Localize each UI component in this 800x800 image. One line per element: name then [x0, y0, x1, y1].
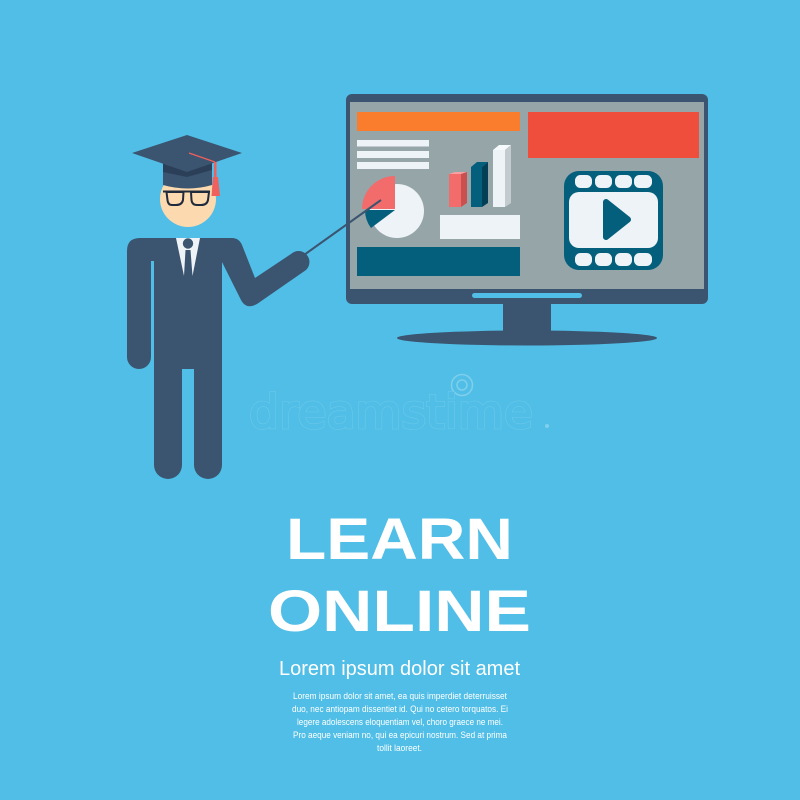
monitor slot — [472, 293, 582, 298]
tassel — [189, 153, 220, 196]
red banner — [528, 112, 699, 158]
watermark: dreamstime — [249, 385, 533, 439]
teal block — [357, 247, 520, 276]
title: ONLINE — [268, 579, 531, 644]
body paragraph: legere adolescens eloquentiam vel, choro graece ne mei. — [297, 717, 503, 727]
shirt collar — [176, 238, 200, 276]
graduation cap — [132, 135, 242, 196]
tie knot — [183, 238, 193, 249]
body paragraph: duo, nec antiopam dissentiet id. Qui no cetero torquatos. Ei — [292, 704, 508, 714]
body paragraph — [292, 691, 508, 753]
subtitle: Lorem ipsum dolor sit amet — [279, 658, 520, 680]
icon: video film — [564, 171, 663, 270]
text lines — [357, 140, 429, 169]
orange banner — [357, 112, 520, 131]
body paragraph: Pro aeque veniam no, qui ea epicuri nostrum. Sed at prima — [293, 730, 507, 740]
head — [160, 171, 216, 227]
monitor base — [397, 330, 657, 346]
body suit — [127, 238, 309, 479]
body paragraph: Lorem ipsum dolor sit amet, ea quis imperdiet deterruisset — [293, 691, 507, 701]
monitor — [346, 94, 708, 346]
monitor stand — [503, 302, 551, 335]
monitor screen — [350, 102, 704, 289]
pie chart — [362, 176, 424, 238]
watermark: dreamstime — [249, 385, 533, 439]
body paragraph: tollit laoreet. — [377, 743, 422, 753]
monitor frame — [346, 94, 708, 304]
title: LEARN — [286, 507, 513, 572]
bar chart — [449, 145, 511, 207]
pointer stick — [304, 200, 381, 255]
presenter figure — [127, 135, 381, 479]
white caption block — [440, 215, 520, 239]
title — [268, 507, 531, 644]
glasses — [163, 192, 210, 205]
